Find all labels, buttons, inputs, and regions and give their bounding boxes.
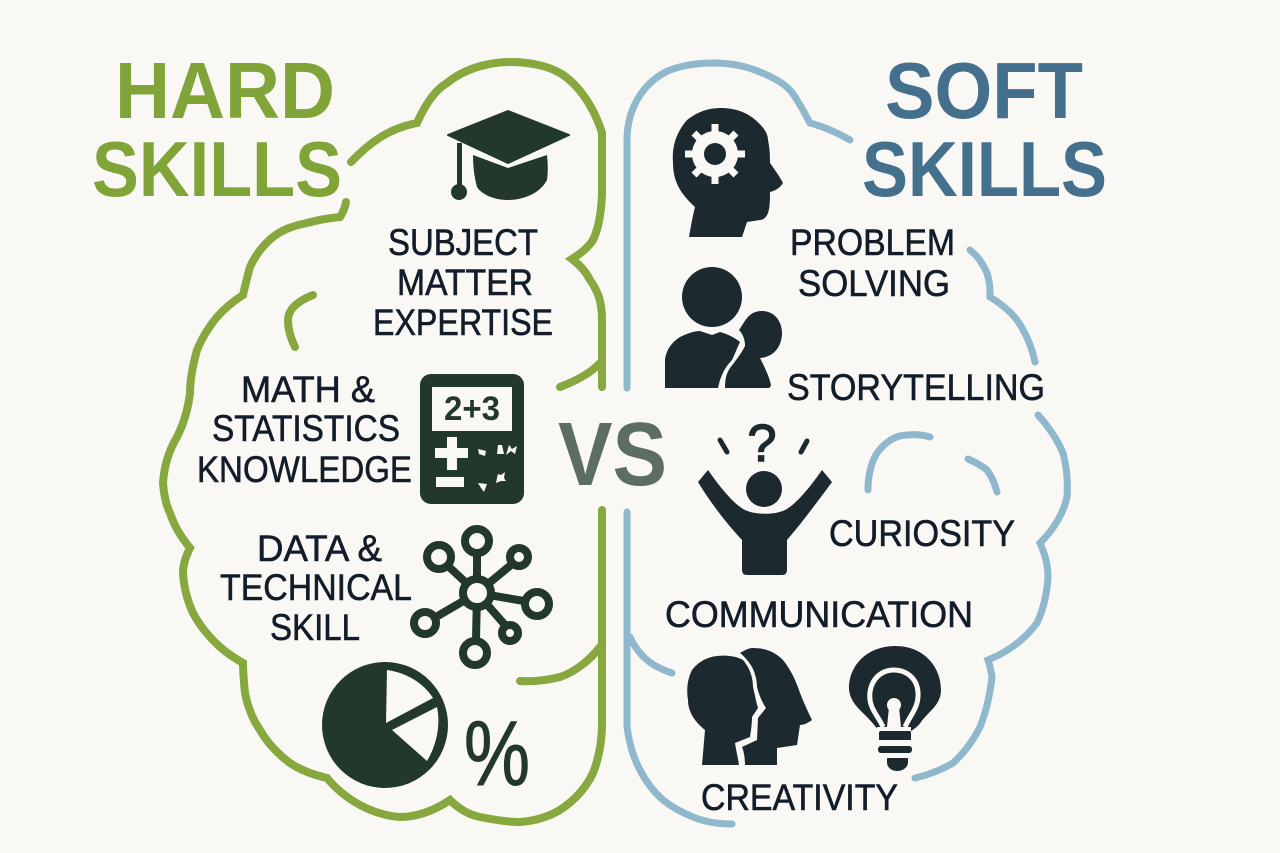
label: subject matter expertise <box>373 222 553 343</box>
label: subject matter expertise: MATTER <box>397 262 533 303</box>
label: data and technical skill: DATA & <box>257 528 382 569</box>
versus label: VS <box>558 405 667 505</box>
label: problem solving: SOLVING <box>798 263 950 304</box>
label: math and statistics knowledge <box>197 369 412 490</box>
title: hard skills: HARD <box>115 46 335 135</box>
label: subject matter expertise: EXPERTISE <box>373 302 553 343</box>
label: subject matter expertise: SUBJECT <box>388 222 538 263</box>
label: data and technical skill: SKILL <box>270 607 360 648</box>
title: hard skills: SKILLS <box>92 125 342 213</box>
label: data and technical skill <box>220 528 412 648</box>
icon: two heads <box>687 648 812 765</box>
title: soft skills: SOFT <box>885 46 1083 135</box>
title: soft skills: SKILLS <box>862 125 1107 213</box>
icon: head with gear <box>673 108 783 237</box>
label: math and statistics knowledge: MATH & <box>241 369 375 410</box>
icon: light bulb <box>849 646 941 771</box>
label: problem solving <box>790 222 955 304</box>
icon: pie chart <box>322 662 448 788</box>
label: storytelling: STORYTELLING <box>787 367 1045 408</box>
icon: person with question mark <box>698 415 832 575</box>
icon: percent sign: % <box>464 703 530 805</box>
icon: calculator <box>420 374 524 504</box>
label: problem solving: PROBLEM <box>790 222 955 263</box>
label: communication: COMMUNICATION <box>665 594 973 635</box>
title: soft skills <box>862 46 1107 213</box>
label: math and statistics knowledge: KNOWLEDGE <box>197 449 412 490</box>
icon: network nodes <box>414 529 549 665</box>
blue brain outline: soft skills <box>627 63 1067 824</box>
label: math and statistics knowledge: STATISTICS <box>212 408 400 449</box>
title: hard skills <box>92 46 342 213</box>
icon: graduation cap <box>448 111 569 200</box>
label: data and technical skill: TECHNICAL <box>220 567 412 608</box>
icon: person with question mark: ? <box>748 415 776 473</box>
green brain outline: hard skills <box>163 62 602 822</box>
label: curiosity: CURIOSITY <box>829 513 1015 554</box>
label: creativity: CREATIVITY <box>701 777 898 818</box>
icon: two people <box>665 267 782 388</box>
icon: calculator: 2+3 <box>444 390 500 428</box>
